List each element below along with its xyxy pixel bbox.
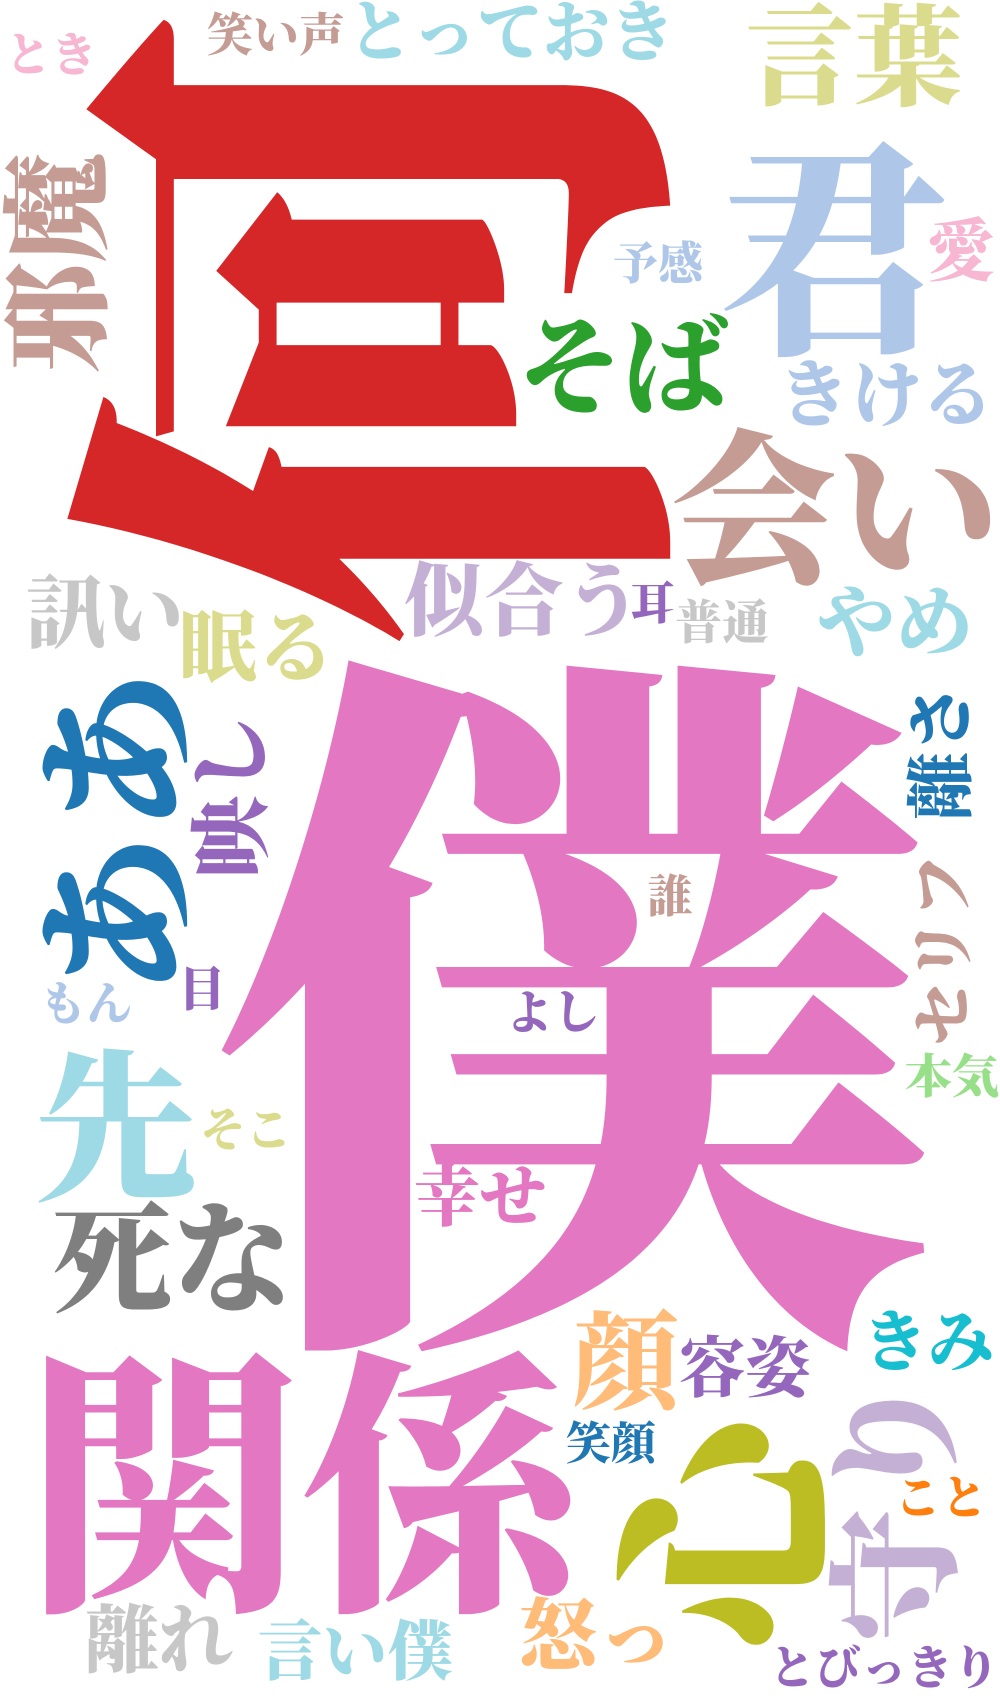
word: 訊い: 訊い <box>26 572 184 659</box>
word: よし: よし <box>506 988 600 1040</box>
word: 守り: 守り <box>825 1371 975 1643</box>
word: こと: こと <box>895 1473 987 1524</box>
word: 心: 心 <box>605 1380 862 1650</box>
word: 先: 先 <box>35 1044 197 1223</box>
word: 似合う: 似合う <box>404 559 644 647</box>
word: 幸せ: 幸せ <box>414 1162 546 1235</box>
word: 眠る: 眠る <box>179 605 335 692</box>
word: 会い: 会い <box>671 423 1000 606</box>
word: そこ: そこ <box>200 1105 292 1156</box>
word: 怒っ: 怒っ <box>519 1593 675 1680</box>
word: 誰: 誰 <box>647 872 693 922</box>
word: とびっきり: とびっきり <box>769 1643 999 1694</box>
word: 容姿: 容姿 <box>679 1333 814 1406</box>
word: 目: 目 <box>178 965 226 1017</box>
word: 死な: 死な <box>52 1195 292 1328</box>
word: 本気: 本気 <box>905 1052 999 1104</box>
word: とき: とき <box>5 30 97 81</box>
word: 普通: 普通 <box>675 598 769 650</box>
word: 邪魔: 邪魔 <box>0 153 121 373</box>
word: 僕: 僕 <box>208 635 934 1438</box>
word: 映し: 映し <box>187 714 278 878</box>
word: ああ: ああ <box>32 668 213 996</box>
word: 愛: 愛 <box>927 214 995 290</box>
word: 何: 何 <box>46 11 748 645</box>
word: もん: もん <box>40 979 132 1030</box>
word: 言い僕: 言い僕 <box>257 1617 453 1689</box>
word: 笑い声: 笑い声 <box>207 10 345 61</box>
word: セリフ: セリフ <box>909 854 980 1046</box>
word: そば: そば <box>517 311 729 428</box>
word: 予感: 予感 <box>613 239 707 289</box>
word: 離さ: 離さ <box>904 684 980 820</box>
word: 顔: 顔 <box>572 1306 684 1424</box>
word: きける: きける <box>778 356 994 436</box>
word: 笑顔: 笑顔 <box>566 1419 658 1469</box>
word: きみ: きみ <box>862 1307 994 1380</box>
word: 耳: 耳 <box>630 579 676 629</box>
word: 関係: 関係 <box>25 1341 603 1649</box>
word: 離れ (grey): 離れ <box>85 1601 233 1683</box>
word: 君: 君 <box>719 131 949 386</box>
word: やめ: やめ <box>817 580 973 667</box>
word: 言葉: 言葉 <box>745 0 963 120</box>
